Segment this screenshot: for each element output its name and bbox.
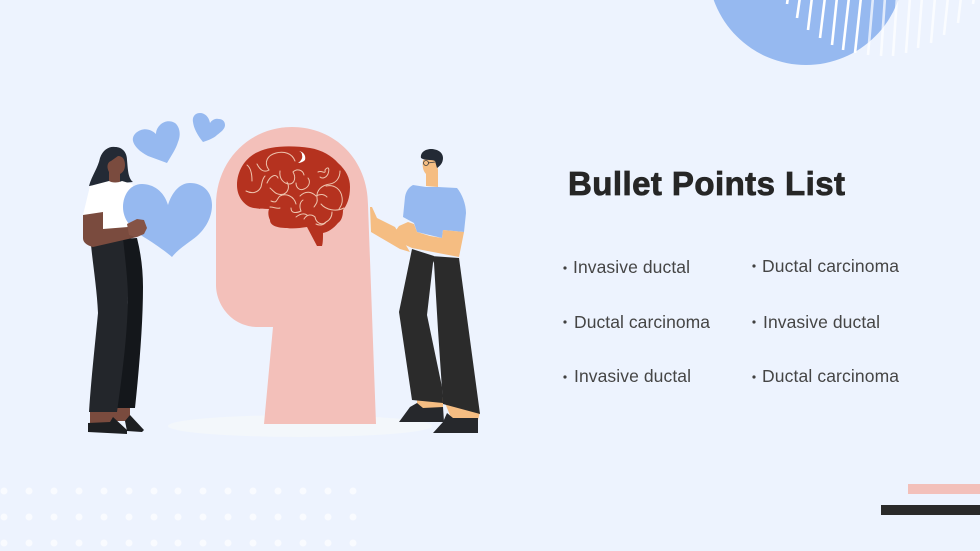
bullet item: Invasive ductal [573,257,690,277]
icon: small heart [193,113,225,142]
figure: woman holding heart [83,147,212,434]
man glasses [424,160,435,166]
bullet item: Invasive ductal [574,366,691,386]
woman back ankle and shoe [113,406,144,432]
bullet item: Ductal carcinoma [762,366,899,386]
icon: large heart [123,183,212,257]
man shirt [403,185,466,238]
bullet item: Ductal carcinoma [574,312,710,332]
man front arm and hand [394,222,464,257]
bullet list: right column [752,256,899,386]
woman hand [127,219,147,237]
man ankles [417,398,480,420]
woman shirt [83,181,140,232]
man trousers [399,249,480,414]
man right shoe [433,413,478,433]
title: Bullet Points List [568,165,845,202]
man back arm [370,207,410,252]
accent bars [881,484,980,515]
woman front ankle and shoe [88,410,127,434]
woman trousers [89,238,143,412]
woman hair [89,147,133,186]
icon: brain [237,146,350,246]
head silhouette [216,127,376,424]
bullet item: Invasive ductal [763,312,880,332]
woman face [108,156,125,183]
man neck and face [423,158,438,187]
decorative circle with stripes [708,0,974,65]
man hair [421,149,443,168]
woman arm [83,212,137,247]
bullet item: Ductal carcinoma [762,256,899,276]
figure: man touching head [370,149,480,433]
icon: medium heart [133,121,180,163]
ground shadow [168,415,432,437]
bullet list: left column [563,257,710,386]
man left shoe [399,403,444,422]
dot pattern [0,488,356,546]
